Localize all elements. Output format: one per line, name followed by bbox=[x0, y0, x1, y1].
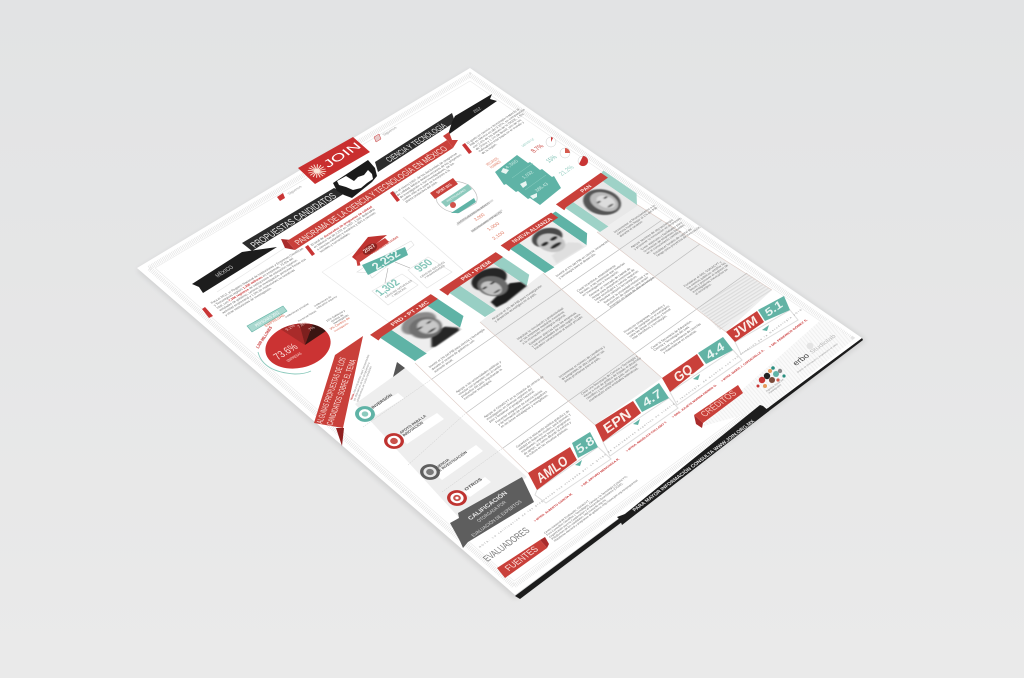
proposals: AMLO, ciencia: Fomentar programas de ciencia básica bbox=[494, 389, 543, 424]
proposals: AMLO, ciencia: Apoyar al CONACYT en la creación de centros de bbox=[483, 375, 545, 419]
section ribbon: panorama bbox=[281, 132, 458, 250]
marker bbox=[390, 191, 400, 202]
proposals: AMLO, otros: calidad en todos los niveles, para jóvenes y bbox=[517, 412, 572, 451]
proposals: Quadri, ciencia: más científicos y tecnólogos. bbox=[631, 314, 668, 340]
score: GQ: GQ bbox=[671, 360, 695, 386]
proposals: Vázquez Mota, ciencia: Fortalecer el SNI, CONACYT y bbox=[683, 260, 723, 288]
proposals: Vázquez Mota, inversión: ciencia hasta llegar al 1% del PIB bbox=[615, 206, 659, 236]
score: GQ: 4.4 bbox=[703, 339, 727, 363]
proposals: AMLO, ciencia: y de formación de nuevos investigadores bbox=[497, 390, 548, 426]
stat: 1,302: CIENCIAS NATURALES bbox=[384, 279, 413, 299]
proposals: EPN, innovación: en las empresas mediante incentivos bbox=[518, 310, 566, 343]
proposals: EPN, innovación: Establecer alianzas entre las empresas bbox=[528, 311, 578, 346]
pie captions: Personas físicas bbox=[297, 309, 318, 323]
banner: algunas propuestas bbox=[314, 336, 363, 446]
proposals: Quadri, innovación: base tecnológica y nuevos negocios bbox=[593, 270, 640, 302]
row label: otros bbox=[443, 477, 491, 509]
text block: investigators: cuales sólo una parte se incorpora a la bbox=[401, 169, 451, 201]
footer ribbon bbox=[617, 405, 769, 525]
proposals: Vázquez Mota, inversión: durante el sexenio. bbox=[618, 220, 644, 238]
text block: sources: Foro Consultivo Científico y Tecnológico; Ciencia y la Tecnología (CONACYT). bbox=[545, 475, 629, 537]
proposals: Quadri, innovación: Reforzar la propiedad intelectual y la bbox=[603, 272, 649, 304]
logo: JOIN bbox=[298, 137, 370, 184]
chart: doctorates 2007 bbox=[352, 235, 452, 305]
stats: researchers: 1,000 bbox=[486, 221, 502, 232]
banner: algunas propuestas: ALGUNAS PROPUESTAS DE LOS bbox=[314, 356, 348, 424]
text block: panorama: a ciencias naturales y medicina y 950 a ciencias bbox=[315, 211, 377, 251]
card: Quadri bbox=[499, 211, 598, 274]
proposals: AMLO, innovación: vincular sus proyectos con el sector bbox=[457, 364, 503, 396]
banner: algunas propuestas: CANDIDATOS SOBRE EL TEMA bbox=[324, 358, 358, 426]
header ribbon bbox=[192, 94, 497, 293]
proposals: Quadri, otros: Ciencia y Tecnología del país. bbox=[652, 325, 691, 352]
marker bbox=[462, 143, 472, 154]
text block: sources: Plataformas de los candidatos, http://www.ife.org.mx bbox=[550, 498, 608, 541]
hatched empty cell bbox=[698, 273, 772, 330]
proposals: AMLO, otros: Garantizar la educación pública gratuita y de bbox=[515, 409, 570, 449]
proposals: EPN, otros: científico y tecnológico del país, con mayor bbox=[585, 362, 640, 400]
column: PAN cells bbox=[597, 202, 772, 332]
proposals: Quadri, ciencia: Promover programas, estímulos y bbox=[623, 303, 666, 334]
heading: evaluadores: EVALUADORES bbox=[481, 526, 533, 564]
text block: panorama: en México fue de 2,252 en 2007, 1,302 dedicados bbox=[313, 207, 376, 249]
text block: sources: Centro Nacional de Evaluación, CONACYT. bbox=[543, 499, 591, 535]
proposals: Quadri, otros: y matemáticas en escuelas. bbox=[662, 329, 698, 354]
social link left: Síguenos bbox=[287, 185, 303, 196]
total ribbon: 2,252 bbox=[368, 248, 404, 272]
text block: investigators: planta productiva del país. bbox=[404, 180, 439, 203]
row label: ciencia e investigación bbox=[416, 445, 483, 483]
proposals: Quadri, otros: Mejorar la enseñanza de ciencias bbox=[659, 322, 702, 352]
proposals: Quadri, ciencia: becas de posgrado en el extranjero bbox=[625, 304, 671, 336]
label: human resources: HUMANOS bbox=[488, 160, 502, 169]
proposals: Vázquez Mota, innovación: riesgo para proyectos de innovación. bbox=[655, 225, 702, 257]
proposals: Quadri, otros: Crear la Secretaría de Educación, bbox=[650, 319, 693, 350]
proposals: AMLO, otros: la cultura en las escuelas públicas. bbox=[525, 427, 569, 458]
header: Propuestas candidatos: PROPUESTAS CANDIDATOS bbox=[249, 192, 340, 250]
social link right bbox=[374, 126, 398, 142]
proposals: EPN, inversión: y desarrollo tecnológico en el país. bbox=[493, 292, 538, 323]
proposals: AMLO, innovación: Apoyar a las universidades públicas y bbox=[455, 360, 502, 394]
header: Ciencia y tecnología: CIENCIA Y TECNOLOGÍA bbox=[383, 121, 449, 164]
stat: 1,302 bbox=[372, 274, 418, 305]
text block: investment: El gasto en ciencia y tecnología respecto al bbox=[466, 108, 521, 145]
paper sheet bbox=[137, 68, 862, 595]
card: Vázquez Mota: PAN bbox=[579, 184, 594, 194]
heading: créditos bbox=[694, 385, 743, 428]
proposals: EPN, otros: coordinación entre entidades federativas. bbox=[588, 366, 640, 402]
text block: investment: de la región. bbox=[480, 143, 498, 155]
text block: panorama: sociales y humanidades. bbox=[318, 232, 351, 253]
row label: otros: OTROS bbox=[463, 477, 483, 492]
text block: investigators: En el mismo 2007, de los doctorados de programas bbox=[393, 152, 458, 195]
stats: researchers: INVESTIGADORES EN MÉXICO bbox=[455, 201, 491, 225]
text block: introduction: y Tecnológicas registró 1,300 millones en empresas, 73.6% del bbox=[213, 257, 294, 307]
calificación box bbox=[450, 477, 534, 548]
row label: apoyo para la innovación: INNOVACIÓN bbox=[401, 420, 425, 437]
text block: introduction: actividad empresarial y 1.5% de instituciones no lucrativas bbox=[221, 268, 296, 314]
credits logo: erbo: Diseño de información y visualización de datos bbox=[796, 342, 840, 374]
world comparison tile: 386.43 bbox=[534, 182, 550, 193]
text block: introduction: y otras instituciones de investigación. bbox=[224, 286, 273, 317]
proposals: EPN, inversión: Alcanzar el 1% del PIB para investigación bbox=[491, 284, 543, 321]
proposals: Vázquez Mota, ciencia: investigadores mexicanos en bbox=[691, 268, 729, 294]
calificación box: EVALUACIÓN DE EXPERTOS bbox=[470, 499, 524, 538]
evaluators list: > DR. ARTURO MENCHACA R. bbox=[580, 457, 621, 488]
pie captions: investigación bbox=[333, 321, 350, 333]
pie captions: Instituciones privadas bbox=[284, 302, 310, 319]
photo: AMLO bbox=[395, 307, 461, 350]
proposals: AMLO, ciencia: en las áreas estratégicas y energéticas. bbox=[500, 393, 549, 429]
proposals: Quadri, innovación: e impulsar parques tecnológicos. bbox=[596, 274, 638, 304]
score: EPN: 4.7 bbox=[640, 386, 665, 410]
photo: Quadri bbox=[523, 223, 585, 264]
credits logo bbox=[756, 366, 787, 394]
pie captions: 9% Centros de bbox=[329, 316, 351, 331]
stats: researchers: 2,100 bbox=[491, 230, 507, 241]
label: people bbox=[247, 306, 287, 332]
proposals: EPN, innovación: y las universidades de cada región, para bbox=[530, 313, 582, 348]
card: EPN bbox=[438, 252, 540, 319]
icon: Mexico map shield bbox=[333, 160, 377, 198]
proposals: AMLO, inversión: durante el sexenio de gobierno, con bbox=[430, 339, 476, 371]
stats: percentages: 21.2% bbox=[558, 165, 576, 177]
row label: ciencia e investigación: CIENCIA bbox=[435, 458, 451, 470]
text block: introduction: total, con 7,386 registros de instituciones de educación superior, bbox=[215, 258, 299, 310]
calificación box: CALIFICACIÓN bbox=[466, 489, 510, 522]
text block: introduction: entidades de gobierno, centros de investigación, personas físicas con bbox=[218, 258, 307, 312]
score: EPN bbox=[595, 383, 678, 456]
stat: 950: CIENCIAS SOCIALES bbox=[419, 261, 446, 279]
proposals: Vázquez Mota, innovación: Apoyar sectores de alta tecnología bbox=[630, 218, 674, 249]
row label: apoyo para la innovación bbox=[380, 413, 444, 452]
panel: table bbox=[355, 202, 772, 522]
proposals: Quadri, inversión: y tecnología para el desarrollo. bbox=[557, 252, 597, 280]
header: year: 2012 bbox=[472, 106, 483, 114]
text block: investigators: de investigación a sus investigadores, de los bbox=[398, 162, 456, 199]
proposals: AMLO, inversión: Invertir el 1% del PIB para ciencia y tecnología bbox=[428, 328, 486, 369]
marker bbox=[305, 245, 315, 256]
evaluators list: > MTRA. ANGÉLICA COLLADO T. bbox=[624, 420, 668, 453]
stat: 1,302: Y MEDICINA bbox=[390, 286, 408, 298]
proposals: Quadri, innovación: protección de patentes para atraer bbox=[605, 275, 650, 306]
evaluators list: > DRA. JULIETA NORMA FIERRO G. bbox=[671, 383, 718, 419]
pie captions: Instituciones de bbox=[313, 295, 333, 308]
score: AMLO bbox=[528, 432, 611, 503]
row label: ciencia e investigación: E INVESTIGACIÓN bbox=[437, 450, 468, 472]
icon: graduation building: 2007 bbox=[362, 243, 378, 254]
heading: fuentes: FUENTES bbox=[503, 545, 541, 573]
caption: doctorates: PROGRAMAS DE CALIDAD bbox=[370, 235, 400, 255]
stats: percentages: 8.7% bbox=[530, 143, 546, 154]
text block: investment: con 2.4% de los países de la OCDE, 1.5% bbox=[471, 113, 525, 149]
stats: researchers: 3,000 bbox=[473, 213, 487, 222]
badge: researchers bbox=[430, 178, 477, 213]
footer ribbon: PARA MAYOR INFORMACIÓN CONSULTA WWW.JOIN.ORG.MX bbox=[630, 418, 757, 513]
proposals: Quadri, innovación: riesgo para pequeñas empresas de bbox=[591, 268, 636, 299]
badge: researchers: INVESTIGADORES bbox=[445, 188, 467, 203]
proposals: AMLO, innovación: productivo del país, impulsando la bbox=[460, 368, 503, 398]
card: Quadri: NUEVA ALIANZA bbox=[511, 217, 555, 244]
proposals: Quadri, innovación: Generar un mercado de capital de bbox=[588, 267, 632, 297]
row label: apoyo para la innovación: APOYO PARA LA bbox=[399, 414, 427, 435]
pie captions: centros de bbox=[330, 313, 345, 323]
photo: Vázquez Mota bbox=[575, 184, 629, 220]
world comparison tile: 4,365 bbox=[504, 159, 520, 170]
credits logo: erbo: erbo bbox=[791, 351, 812, 367]
heading: créditos: CRÉDITOS bbox=[699, 389, 739, 419]
score: JVM: JVM bbox=[730, 313, 760, 341]
stats: researchers bbox=[455, 200, 507, 241]
stat: 950: Y HUMANIDADES bbox=[423, 264, 446, 279]
world comparison tile: 1,032 bbox=[521, 170, 536, 180]
proposals: Quadri, innovación: Crear incentivos, especialmente bbox=[576, 264, 617, 293]
card: EPN: PRI • PVEM bbox=[460, 260, 493, 282]
logo: JOIN: JOIN bbox=[320, 140, 364, 170]
proposals: AMLO, otros: de apoyo, así como difundir la ciencia y bbox=[523, 420, 572, 456]
stat: 950 bbox=[408, 257, 452, 288]
section ribbon: panorama: PANORAMA DE LA CIENCIA Y TECNOLOGÍA EN MÉXICO bbox=[292, 144, 450, 247]
text block: sources: Plataforma electoral y programas de gobierno, http://www.join.org.mx/propuestas bbox=[553, 478, 639, 543]
evaluators list bbox=[532, 317, 809, 523]
proposals: AMLO, otros: estudiantes; impulsar becas y programas bbox=[520, 417, 572, 453]
pie captions: investigación bbox=[332, 313, 350, 325]
text block: investment: PIB en México es del 0.37%, en comparación bbox=[468, 108, 526, 147]
proposals: Vázquez Mota, innovación: la creación de empresas basadas bbox=[642, 223, 686, 253]
proposals: EPN, innovación: Impulsar la vinculación y productividad bbox=[516, 307, 565, 341]
score: JVM: 5.1 bbox=[763, 298, 785, 320]
proposals: Vázquez Mota, innovación: Establecer fondos de capital de bbox=[652, 228, 693, 255]
proposals: Vázquez Mota, innovación: y promover la innovación en empresas. bbox=[632, 217, 683, 251]
proposals: EPN, ciencia: áreas prioritarias para el país. bbox=[563, 356, 601, 383]
proposals: Quadri, inversión: Invertir el 2% del PIB en ciencia, innovación bbox=[555, 239, 610, 278]
proposals: AMLO, ciencia: investigación en diversas regiones del bbox=[485, 387, 533, 421]
stats: percentages: GASTO EN CyT bbox=[521, 138, 535, 148]
social link right: Síguenos bbox=[382, 126, 398, 137]
pie captions bbox=[263, 293, 351, 333]
note line: NOTA: La calificación de las propuestas fue otorgada por un grupo de evaluadores expertos en ciencia y tecnología, de acuerdo con los criterios de la metodología JOIN bbox=[478, 308, 803, 549]
note: banner: plataformas de cada candidato bbox=[355, 365, 373, 402]
pie chart: 1,300 MILLONES bbox=[255, 325, 273, 350]
score: JVM bbox=[726, 296, 798, 354]
proposals: Vázquez Mota, innovación: en el conocimiento científico. bbox=[645, 229, 683, 255]
note: banner: Nota: las propuestas aquí presentadas bbox=[349, 354, 370, 400]
row label: inversión: INVERSIÓN bbox=[370, 393, 393, 410]
label: people: PERSONAS 2012 bbox=[254, 310, 281, 328]
photo: EPN bbox=[461, 263, 529, 308]
proposals: EPN, otros: elevar a nivel de política de Estado el desarrollo bbox=[582, 356, 642, 398]
score: GQ bbox=[662, 337, 742, 405]
card: Vázquez Mota bbox=[554, 170, 647, 233]
calificación box: OTORGADA POR bbox=[476, 500, 508, 524]
label: human resources: RECURSOS bbox=[485, 156, 500, 167]
stats: researchers: INVESTIGADORES POR MILLÓN bbox=[469, 210, 503, 233]
pie chart: 7.8% bbox=[296, 320, 308, 329]
text block: sources: Organización para la Cooperación y el Desarrollo Económicos (OCDE). bbox=[548, 482, 624, 539]
evaluators list: > DR. FEDERICO GÓMEZ S. bbox=[767, 317, 809, 349]
stat: 1,302: 1,302 bbox=[373, 278, 403, 298]
pie chart bbox=[256, 322, 331, 374]
proposals: EPN, innovación: a la innovación tecnológica regional. bbox=[521, 313, 567, 345]
proposals: AMLO, ciencia: país y fortalecer el posgrado nacional. bbox=[488, 389, 536, 423]
text block: investment: indicadores más bajos en el mundo y bbox=[477, 121, 525, 153]
evaluators list: > MTRA. MARÍA J. CAPDEVIELLE A. bbox=[719, 348, 766, 383]
evaluators list: > MTRO. ALBERTO GARCÍA M. bbox=[532, 491, 574, 523]
credits logo: Investigación bbox=[767, 383, 783, 394]
text block: investment: de China y 1.1% de Brasil; uno de los bbox=[474, 118, 523, 151]
proposals: EPN, ciencia: Incrementar el número de científicos y bbox=[558, 345, 606, 379]
stats: percentages: 15% bbox=[545, 155, 559, 164]
pie chart: 7% bbox=[307, 325, 316, 332]
proposals: AMLO, innovación: innovación tecnológica. bbox=[463, 379, 493, 401]
social link left bbox=[277, 185, 303, 201]
pie captions: EMPRESAS bbox=[263, 313, 286, 328]
credits logo: erbo bbox=[791, 333, 840, 374]
proposals: Vázquez Mota, ciencia: el extranjero. bbox=[694, 283, 713, 296]
text block: introduction: Para el 2012, el Registro Nacional de Instituciones y Empresas Científicas bbox=[210, 247, 305, 305]
pie chart: 9.1% bbox=[284, 323, 296, 332]
badge: researchers: SPORT 2011 bbox=[435, 182, 453, 195]
note: banner: se obtuvieron de los programas y bbox=[352, 361, 371, 401]
score: EPN: EPN bbox=[600, 405, 634, 437]
stats: percentages bbox=[521, 137, 588, 177]
proposals: EPN, otros: Crear una Secretaría de Ciencia y Tecnología y bbox=[580, 354, 639, 396]
proposals: EPN, ciencia: de posgrados de alta calidad en las bbox=[560, 349, 606, 381]
arrow marker bbox=[393, 362, 405, 377]
proposals: Quadri, ciencia: para las áreas prioritarias y formar bbox=[628, 307, 673, 338]
pie captions: educación superior bbox=[315, 295, 338, 310]
pie chart: 73.6% bbox=[271, 342, 301, 362]
marker bbox=[202, 307, 213, 318]
icon: sunburst bbox=[304, 162, 330, 180]
text block: panorama: El total de doctorados de programas de calidad bbox=[310, 205, 373, 247]
header: México: MÉXICO bbox=[214, 264, 236, 279]
score: AMLO: 5.8 bbox=[573, 433, 597, 457]
proposals: Quadri, innovación: fiscales, a las empresas que inviertan bbox=[578, 262, 626, 295]
proposals: Vázquez Mota, inversión: Incrementar el financiamiento a la bbox=[613, 204, 656, 234]
text block: investigators: de calidad, México destina recursos de los proyectos bbox=[395, 153, 463, 197]
stat: 950: 950 bbox=[412, 258, 436, 274]
world comparison tile bbox=[495, 155, 561, 205]
pie captions: 10% Gobierno y bbox=[325, 309, 347, 323]
pie chart: EMPRESAS bbox=[285, 351, 303, 363]
score: AMLO: AMLO bbox=[534, 452, 570, 486]
proposals: Quadri, innovación: en investigación e innovación. bbox=[581, 270, 620, 297]
heading: fuentes bbox=[497, 537, 549, 578]
credits logo: erbo: Studiolab bbox=[809, 333, 839, 355]
row labels column bbox=[355, 368, 527, 522]
paper shadow bbox=[137, 70, 866, 599]
card: AMLO bbox=[369, 294, 474, 363]
proposals: Vázquez Mota, ciencia: becas y promover el regreso de bbox=[688, 264, 729, 292]
paper edge bbox=[515, 338, 863, 599]
card: AMLO: PRD • PT • MC bbox=[390, 300, 431, 327]
row label: inversión bbox=[351, 393, 404, 425]
proposals: Vázquez Mota, innovación: Crear estímulos y facilidades para bbox=[639, 221, 683, 251]
proposals: Quadri, innovación: inversión en áreas de alta tecnología. bbox=[608, 276, 656, 308]
credits logo: Agencia Social de bbox=[765, 378, 785, 393]
column: PRI + PVEM cells bbox=[480, 273, 662, 425]
proposals: EPN, innovación: transferir conocimiento al sector privado. bbox=[533, 315, 584, 350]
proposals: Vázquez Mota, ciencia: los centros públicos, ampliar las bbox=[685, 261, 727, 290]
panel: credits hatch bbox=[700, 318, 853, 427]
proposals: AMLO, inversión: aumento anual. bbox=[433, 358, 454, 373]
